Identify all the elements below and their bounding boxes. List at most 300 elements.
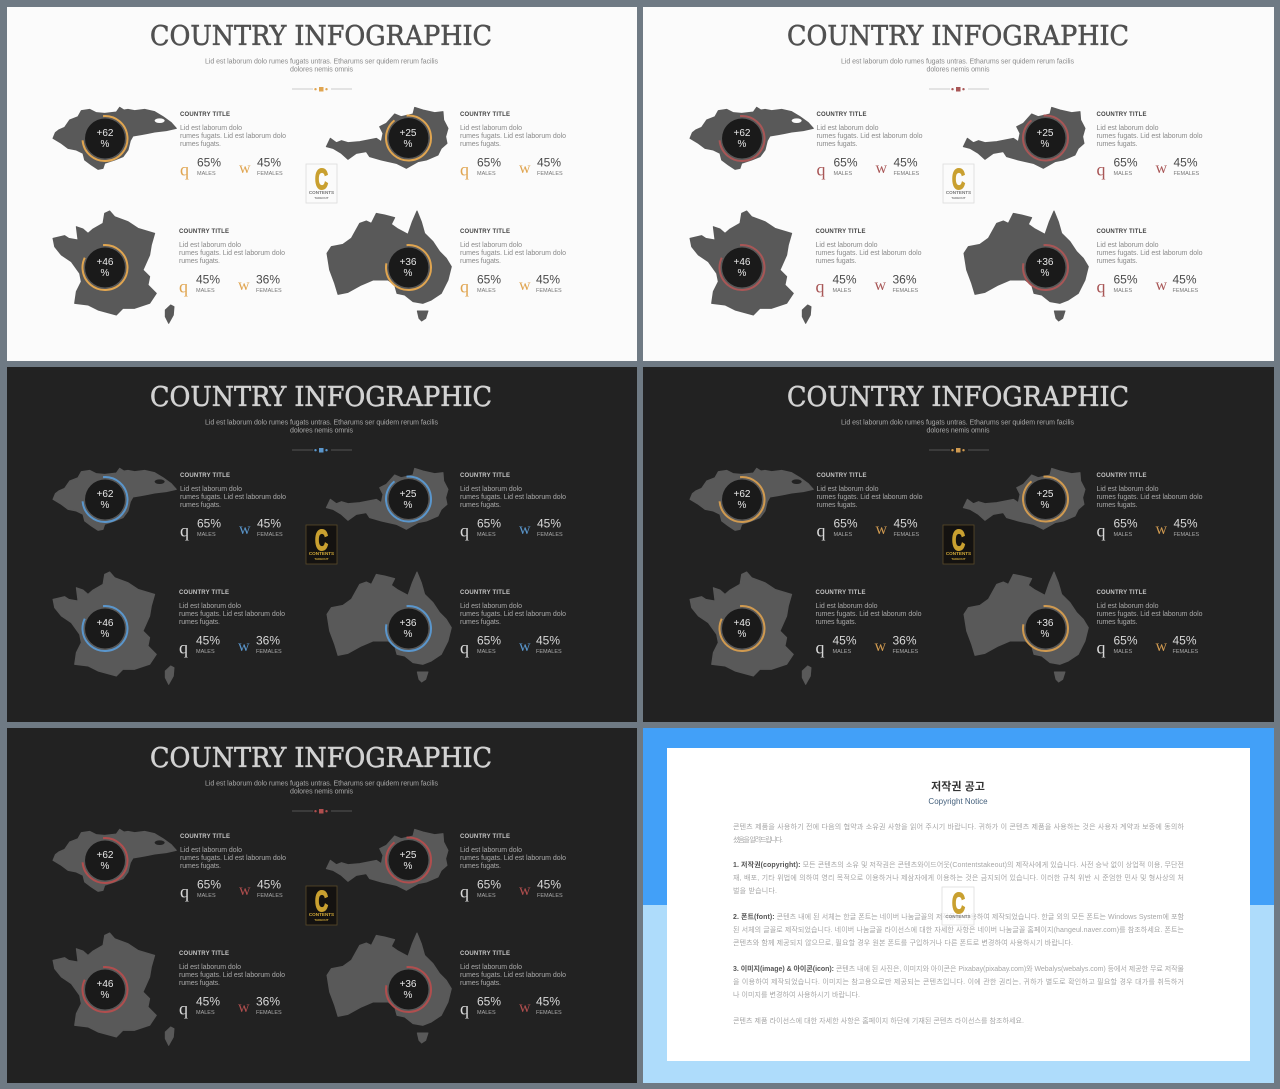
divider ornament: [292, 448, 352, 452]
country text and stats: q: [816, 638, 824, 658]
logo: [943, 164, 974, 203]
country text and stats: q: [816, 520, 826, 540]
country text and stats: rumes fugats. Lid est laborum dolo: [1096, 133, 1203, 140]
map: Australia: [327, 572, 451, 682]
country text and stats: Lid est laborum dolo: [179, 603, 241, 610]
percent badge: +36: %: [1041, 268, 1050, 279]
percent badge: +46: +46: [97, 257, 114, 268]
country text and stats: FEMALES: [1172, 649, 1199, 655]
country text and stats: rumes fugats. Lid est laborum dolo: [180, 855, 286, 862]
country text and stats: 65%: [477, 156, 501, 170]
country text and stats: 65%: [477, 994, 501, 1008]
percent badge: +36: +36: [1037, 618, 1054, 629]
country text and stats: Lid est laborum dolo: [179, 964, 241, 971]
country text and stats: w: [519, 277, 531, 294]
percent badge: +36: [384, 965, 433, 1014]
country text and stats: rumes fugats.: [460, 502, 501, 509]
map: Honduras: [53, 107, 176, 169]
country text and stats: Lid est laborum dolo: [460, 242, 522, 249]
country text and stats: q: [460, 882, 469, 902]
logo: TAKEOUT: [951, 557, 966, 561]
panel: copyright notice: [643, 728, 1274, 1083]
country text and stats: [816, 229, 922, 296]
country text and stats: 65%: [197, 516, 221, 530]
country text and stats: q: [816, 276, 824, 296]
percent badge: +62: [81, 475, 129, 524]
country block: France: [690, 211, 922, 323]
country text and stats: Lid est laborum dolo: [460, 603, 522, 610]
light blue lower background: [643, 905, 1274, 1083]
country text and stats: w: [874, 638, 886, 655]
country text and stats: 65%: [1114, 516, 1138, 530]
country text and stats: Lid est laborum dolo: [816, 486, 879, 493]
country text and stats: w: [1156, 521, 1168, 538]
country text and stats: q: [1096, 276, 1106, 296]
percent badge: +25: [384, 836, 433, 884]
country text and stats: COUNTRY TITLE: [816, 590, 866, 596]
country text and stats: q: [1096, 638, 1106, 658]
country text and stats: 36%: [256, 994, 280, 1008]
percent badge: +62: [81, 836, 129, 885]
country text and stats: Lid est laborum dolo: [816, 125, 879, 132]
country text and stats: [460, 834, 566, 902]
subtitle: Lid est laborum dolo rumes fugats untras. Etharums ser quidem rerum facilis: [205, 780, 438, 788]
country text and stats: [180, 834, 286, 902]
country block: Austria: [326, 829, 566, 902]
country text and stats: COUNTRY TITLE: [1096, 112, 1146, 118]
country text and stats: Lid est laborum dolo: [1096, 242, 1159, 249]
country text and stats: 36%: [256, 272, 280, 286]
blue upper background: [643, 728, 1274, 905]
country text and stats: FEMALES: [536, 288, 562, 294]
country text and stats: q: [460, 276, 469, 296]
logo: C: [952, 888, 965, 920]
country text and stats: MALES: [1114, 171, 1132, 177]
percent badge: +46: %: [738, 629, 747, 640]
country text and stats: rumes fugats.: [179, 619, 220, 626]
percent badge: +36: [1021, 243, 1070, 292]
percent badge: +36: %: [404, 990, 413, 1001]
country block: Australia: [327, 933, 566, 1043]
country text and stats: w: [238, 277, 250, 294]
map: Austria: [326, 107, 448, 168]
country text and stats: q: [180, 520, 189, 540]
country text and stats: [460, 473, 566, 540]
map: France: [53, 211, 174, 323]
country text and stats: MALES: [834, 532, 852, 538]
country text and stats: rumes fugats.: [460, 980, 501, 987]
percent badge: +36: [384, 604, 433, 653]
country text and stats: w: [238, 638, 250, 655]
country text and stats: 65%: [197, 156, 221, 170]
country text and stats: 45%: [536, 272, 560, 286]
divider ornament: [292, 809, 352, 814]
country text and stats: w: [239, 160, 251, 177]
country text and stats: COUNTRY TITLE: [179, 590, 229, 596]
country text and stats: FEMALES: [894, 171, 920, 177]
country text and stats: MALES: [834, 171, 852, 177]
clause 3: image and icon: 나 이미지를 변경하여 사용하시기 바랍니다.: [733, 990, 860, 999]
country text and stats: w: [1156, 277, 1168, 294]
country text and stats: rumes fugats.: [816, 258, 857, 265]
map: France: [690, 211, 811, 323]
percent badge: +36: +36: [400, 257, 417, 268]
country text and stats: Lid est laborum dolo: [460, 847, 522, 854]
country text and stats: COUNTRY TITLE: [816, 473, 866, 479]
clause 2: font: 2. 폰트(font): 콘텐츠 내에 된 서체는 한글 폰트는 네이버 나눔글꼴의 저작물을 사용하여 제작되었습니다. 한글 외의 모든 폰트는 Windows System에 포함: [733, 912, 1185, 921]
country text and stats: 45%: [537, 516, 561, 530]
percent badge: +25: [1021, 475, 1070, 523]
clause 2: font: 콘텐츠와 함께 제공되지 않으므로, 필요할 경우 원본 폰트를 구입하거나 다른 폰트로 변경하여 사용하시기 바랍니다.: [733, 938, 1073, 947]
logo: C: [315, 886, 328, 918]
percent badge: +62: %: [738, 139, 747, 150]
notice heading: 저작권 공고: [931, 779, 985, 793]
country text and stats: rumes fugats.: [460, 863, 501, 870]
country text and stats: 45%: [832, 634, 857, 648]
country text and stats: w: [519, 160, 531, 177]
country text and stats: FEMALES: [256, 649, 282, 655]
country text and stats: w: [238, 999, 250, 1016]
percent badge: +46: +46: [734, 618, 751, 629]
subtitle: [205, 780, 438, 796]
country text and stats: MALES: [197, 171, 216, 177]
country text and stats: 45%: [1172, 634, 1197, 648]
country text and stats: COUNTRY TITLE: [460, 834, 510, 840]
subtitle: [841, 420, 1074, 434]
country text and stats: FEMALES: [536, 1010, 562, 1016]
country text and stats: w: [519, 999, 531, 1016]
map: Australia: [964, 211, 1088, 321]
country block: Austria: [963, 468, 1203, 540]
title: COUNTRY INFOGRAPHIC: [150, 20, 492, 52]
country text and stats: rumes fugats.: [179, 980, 220, 987]
country text and stats: rumes fugats. Lid est laborum dolo: [179, 250, 285, 257]
percent badge: +36: +36: [1037, 257, 1054, 268]
country text and stats: COUNTRY TITLE: [179, 951, 229, 957]
subtitle: Lid est laborum dolo rumes fugats untras. Etharums ser quidem rerum facilis: [205, 58, 438, 66]
slide background: [7, 7, 637, 361]
country text and stats: 45%: [536, 634, 560, 648]
country text and stats: COUNTRY TITLE: [180, 834, 230, 840]
country text and stats: rumes fugats. Lid est laborum dolo: [180, 494, 286, 501]
country text and stats: Lid est laborum dolo: [1096, 603, 1159, 610]
map: Australia: [327, 933, 451, 1043]
country text and stats: 65%: [477, 272, 501, 286]
clause 3: image and icon: [733, 964, 1185, 999]
logo: TAKEOUT: [314, 918, 329, 922]
map: France: [690, 572, 811, 684]
logo: TAKEOUT: [314, 196, 329, 200]
country text and stats: 65%: [1114, 156, 1138, 170]
country text and stats: rumes fugats.: [180, 141, 221, 148]
logo: CONTENTS: [309, 912, 334, 917]
percent badge: +62: +62: [97, 489, 114, 500]
map: Honduras: [53, 468, 176, 530]
country text and stats: rumes fugats. Lid est laborum dolo: [460, 494, 566, 501]
percent badge: +25: +25: [400, 850, 417, 861]
country text and stats: COUNTRY TITLE: [1096, 229, 1146, 235]
panel: dark red slide: [7, 728, 637, 1083]
country block: Honduras: [690, 107, 923, 180]
country block: Australia: [327, 211, 566, 321]
percent badge: +62: +62: [97, 128, 114, 139]
country text and stats: MALES: [196, 288, 215, 294]
percent badge: +62: %: [101, 139, 110, 150]
map: Australia: [327, 211, 451, 321]
percent badge: +25: +25: [1037, 128, 1054, 139]
country text and stats: rumes fugats. Lid est laborum dolo: [1096, 494, 1203, 501]
country text and stats: Lid est laborum dolo: [816, 242, 878, 249]
country text and stats: w: [519, 521, 531, 538]
country text and stats: rumes fugats. Lid est laborum dolo: [1096, 250, 1203, 257]
percent badge: +46: +46: [734, 257, 751, 268]
subtitle: dolores nemis omnis: [926, 428, 990, 434]
subtitle: dolores nemis omnis: [290, 788, 354, 796]
percent badge: +46: %: [738, 268, 747, 279]
subtitle: [205, 420, 438, 434]
country text and stats: rumes fugats.: [179, 258, 220, 265]
country text and stats: rumes fugats. Lid est laborum dolo: [460, 855, 566, 862]
country text and stats: rumes fugats. Lid est laborum dolo: [1096, 611, 1203, 618]
country text and stats: COUNTRY TITLE: [1096, 473, 1146, 479]
logo: CONTENTS: [309, 551, 334, 556]
percent badge: +62: [718, 475, 766, 524]
country text and stats: 45%: [1172, 272, 1197, 286]
country text and stats: 45%: [832, 272, 857, 286]
country block: Australia: [964, 211, 1203, 321]
percent badge: +46: [718, 604, 766, 653]
percent badge: +36: [1021, 604, 1070, 653]
country text and stats: rumes fugats. Lid est laborum dolo: [816, 133, 923, 140]
percent badge: +62: %: [101, 500, 110, 511]
country text and stats: Lid est laborum dolo: [180, 847, 242, 854]
country text and stats: FEMALES: [1174, 171, 1200, 177]
country text and stats: w: [874, 277, 886, 294]
country text and stats: Lid est laborum dolo: [180, 125, 242, 132]
country text and stats: MALES: [832, 649, 851, 655]
map: Honduras: [53, 829, 176, 891]
country text and stats: 45%: [196, 634, 220, 648]
country block: Honduras: [53, 829, 286, 902]
country text and stats: 45%: [257, 156, 281, 170]
country text and stats: rumes fugats. Lid est laborum dolo: [179, 611, 285, 618]
logo: [943, 525, 974, 564]
country text and stats: [460, 951, 566, 1018]
logo: C: [952, 164, 965, 196]
country text and stats: 65%: [477, 516, 501, 530]
percent badge: +62: [81, 114, 129, 163]
country text and stats: COUNTRY TITLE: [179, 229, 229, 235]
country text and stats: 65%: [477, 634, 501, 648]
country text and stats: 45%: [257, 878, 281, 892]
country text and stats: rumes fugats.: [460, 619, 501, 626]
country text and stats: FEMALES: [1172, 288, 1199, 294]
country block: Australia: [327, 572, 566, 682]
percent badge: +36: +36: [400, 618, 417, 629]
divider ornament: [929, 87, 989, 92]
percent badge: +46: %: [101, 990, 110, 1001]
country text and stats: 65%: [834, 156, 858, 170]
country text and stats: FEMALES: [892, 288, 919, 294]
country text and stats: 45%: [196, 272, 220, 286]
percent badge: +36: +36: [400, 979, 417, 990]
percent badge: +46: +46: [97, 618, 114, 629]
country text and stats: q: [460, 998, 469, 1018]
panel: dark blue slide: [7, 367, 637, 722]
country text and stats: Lid est laborum dolo: [1096, 125, 1159, 132]
country text and stats: Lid est laborum dolo: [460, 125, 522, 132]
logo: CONTENTS: [946, 551, 971, 556]
country text and stats: FEMALES: [894, 532, 920, 538]
map: Australia: [964, 572, 1088, 682]
country text and stats: [460, 590, 566, 658]
country text and stats: w: [519, 638, 531, 655]
percent badge: +25: [384, 475, 433, 523]
percent badge: +62: %: [101, 861, 110, 872]
country block: Austria: [326, 468, 566, 540]
map: France: [53, 572, 174, 684]
country text and stats: [180, 473, 286, 540]
subtitle: dolores nemis omnis: [290, 66, 354, 74]
percent badge: +25: +25: [400, 489, 417, 500]
country text and stats: MALES: [196, 1010, 215, 1016]
country text and stats: COUNTRY TITLE: [460, 229, 510, 235]
country text and stats: rumes fugats. Lid est laborum dolo: [460, 133, 566, 140]
clause 3: image and icon: 을 이용하여 제작되었습니다. 이미지는 참고용으로만 제공되는 콘텐츠입니다. 이에 관한 권리는, 귀하가 별도로 확인하고 필요할 경우 대가를 취득하거: [733, 977, 1184, 986]
country text and stats: 45%: [1174, 516, 1198, 530]
country text and stats: rumes fugats.: [460, 141, 501, 148]
country text and stats: Lid est laborum dolo: [179, 242, 241, 249]
country block: France: [53, 933, 285, 1045]
percent badge: +25: %: [404, 139, 413, 150]
slide background: [643, 7, 1274, 361]
country text and stats: COUNTRY TITLE: [460, 473, 510, 479]
country text and stats: FEMALES: [537, 893, 563, 899]
title: COUNTRY INFOGRAPHIC: [787, 381, 1129, 413]
country text and stats: rumes fugats. Lid est laborum dolo: [180, 133, 286, 140]
country block: France: [690, 572, 922, 684]
country text and stats: COUNTRY TITLE: [460, 112, 510, 118]
country text and stats: rumes fugats.: [180, 863, 221, 870]
country text and stats: 36%: [256, 634, 280, 648]
country text and stats: MALES: [1114, 288, 1132, 294]
notice subheading: Copyright Notice: [928, 797, 988, 806]
country text and stats: w: [239, 882, 251, 899]
country text and stats: Lid est laborum dolo: [816, 603, 878, 610]
subtitle: dolores nemis omnis: [926, 66, 990, 74]
percent badge: +25: %: [404, 861, 413, 872]
country text and stats: MALES: [477, 171, 496, 177]
percent badge: +46: [81, 965, 129, 1014]
country text and stats: MALES: [477, 649, 496, 655]
intro paragraph: 콘텐츠 제품을 사용하기 전에 다음의 협약과 소유권 사항을 읽어 주시기 바랍니다. 귀하가 이 콘텐츠 제품을 사용하는 것은 사용자 계약과 보증에 동의하: [733, 822, 1185, 831]
map: Austria: [326, 829, 448, 890]
country text and stats: [816, 473, 923, 540]
clause 2: font: 된 서체의 글꼴로 제작되었습니다. 네이버 나눔글꼴 라이선스에 대한 자세한 사항은 네이버 나눔글꼴 홈페이지(hangeul.naver.com)를 참조하세요. 폰트는: [733, 925, 1185, 934]
country text and stats: FEMALES: [257, 532, 283, 538]
country text and stats: 45%: [1174, 156, 1198, 170]
country block: France: [53, 211, 285, 323]
country block: Austria: [326, 107, 566, 180]
country text and stats: w: [239, 521, 251, 538]
country text and stats: 45%: [894, 516, 918, 530]
clause 1: copyright: 1. 저작권(copyright): 모든 콘텐츠의 소유 및 저작권은 콘텐츠와이드어웃(Contentstakeout)의 제작사에게 있습니다. 사전 승낙 없이 상업적 이용, 무단전: [733, 860, 1184, 869]
title: COUNTRY INFOGRAPHIC: [787, 20, 1129, 52]
percent badge: +25: %: [404, 500, 413, 511]
percent badge: +25: %: [1041, 500, 1050, 511]
map: Austria: [963, 468, 1085, 529]
country text and stats: COUNTRY TITLE: [816, 229, 866, 235]
country text and stats: 65%: [1114, 272, 1138, 286]
country text and stats: 45%: [257, 516, 281, 530]
country text and stats: FEMALES: [257, 893, 283, 899]
subtitle: [205, 58, 438, 74]
subtitle: Lid est laborum dolo rumes fugats untras. Etharums ser quidem rerum facilis: [841, 420, 1074, 426]
country text and stats: w: [519, 882, 531, 899]
country text and stats: FEMALES: [536, 649, 562, 655]
logo: [942, 887, 974, 925]
country text and stats: COUNTRY TITLE: [180, 473, 230, 479]
country text and stats: [179, 229, 285, 296]
map: France: [53, 933, 174, 1045]
title: COUNTRY INFOGRAPHIC: [150, 742, 492, 774]
country text and stats: COUNTRY TITLE: [460, 590, 510, 596]
country block: Australia: [964, 572, 1203, 682]
country text and stats: w: [876, 160, 888, 177]
percent badge: +25: +25: [400, 128, 417, 139]
country text and stats: COUNTRY TITLE: [816, 112, 866, 118]
country text and stats: q: [180, 882, 189, 902]
country text and stats: Lid est laborum dolo: [1096, 486, 1159, 493]
country text and stats: [816, 112, 923, 180]
closing line: 콘텐츠 제품 라이선스에 대한 자세한 사항은 홈페이지 하단에 기재된 콘텐츠 라이선스를 참조하세요.: [733, 1016, 1024, 1025]
percent badge: +46: %: [101, 629, 110, 640]
country text and stats: MALES: [477, 893, 496, 899]
country text and stats: rumes fugats. Lid est laborum dolo: [179, 972, 285, 979]
country text and stats: q: [460, 160, 469, 180]
country block: Honduras: [53, 468, 286, 540]
percent badge: +36: %: [404, 629, 413, 640]
country text and stats: q: [180, 160, 189, 180]
country text and stats: FEMALES: [256, 1010, 282, 1016]
logo: TAKEOUT: [314, 557, 329, 561]
country text and stats: 45%: [536, 994, 560, 1008]
percent badge: +62: %: [738, 500, 747, 511]
percent badge: +46: +46: [97, 979, 114, 990]
slide background: [7, 728, 637, 1083]
percent badge: +25: [384, 114, 433, 162]
country text and stats: 65%: [834, 516, 858, 530]
map: Honduras: [690, 107, 813, 169]
logo: C: [315, 525, 328, 557]
logo: TAKEOUT: [951, 196, 966, 200]
country text and stats: 65%: [197, 878, 221, 892]
country text and stats: MALES: [477, 288, 496, 294]
country text and stats: rumes fugats.: [460, 258, 501, 265]
percent badge: +46: [718, 243, 766, 292]
title: COUNTRY INFOGRAPHIC: [150, 381, 492, 413]
country text and stats: rumes fugats.: [816, 619, 857, 626]
country text and stats: rumes fugats.: [180, 502, 221, 509]
country block: Honduras: [690, 468, 923, 540]
country text and stats: FEMALES: [892, 649, 919, 655]
country block: France: [53, 572, 285, 684]
country text and stats: rumes fugats.: [1096, 141, 1138, 148]
percent badge: +46: %: [101, 268, 110, 279]
country text and stats: FEMALES: [256, 288, 282, 294]
logo: [306, 164, 337, 203]
percent badge: +25: +25: [1037, 489, 1054, 500]
